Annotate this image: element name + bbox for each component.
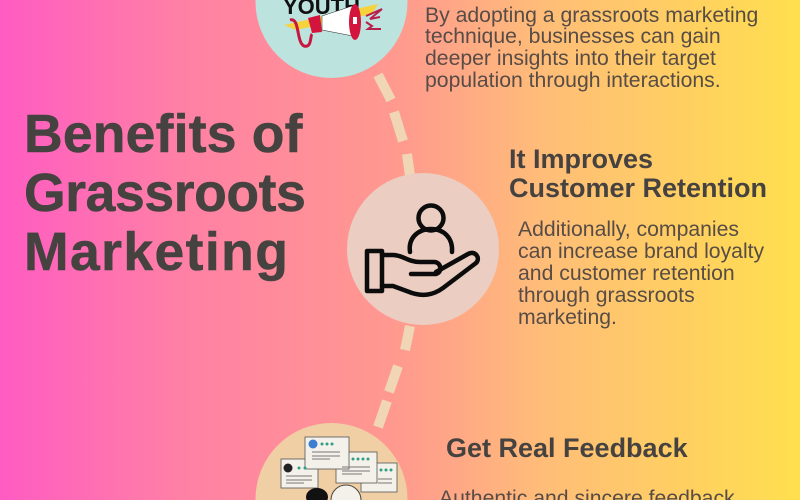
text block: insights: technique, businesses can gain (425, 25, 721, 48)
text block: customer retention: can increase brand loyalty (518, 240, 764, 262)
heading: customer retention: It Improves (509, 144, 653, 174)
text block: insights: population through interactions. (425, 69, 721, 92)
heading: real feedback: Get Real Feedback (446, 433, 688, 463)
icon: hand holding person circle (347, 173, 499, 325)
title: Benefits of (24, 105, 303, 164)
icon: customer reviews circle (256, 423, 408, 500)
text block: customer retention (518, 218, 764, 328)
title (24, 105, 305, 282)
title: Grassroots (24, 164, 305, 223)
text block: customer retention: marketing. (518, 306, 617, 328)
text block: customer retention: and customer retention (518, 262, 735, 284)
icon: megaphone circle (256, 0, 408, 78)
heading: customer retention (509, 144, 767, 203)
text block: customer retention: through grassroots (518, 284, 695, 306)
text block: insights: deeper insights into their target (425, 47, 716, 70)
title: Marketing (24, 223, 289, 282)
heading: customer retention: Customer Retention (509, 173, 767, 203)
text block: customer retention: Additionally, companies (518, 218, 739, 240)
text block: insights (425, 4, 758, 92)
text block: insights: By adopting a grassroots marketing (425, 4, 758, 26)
